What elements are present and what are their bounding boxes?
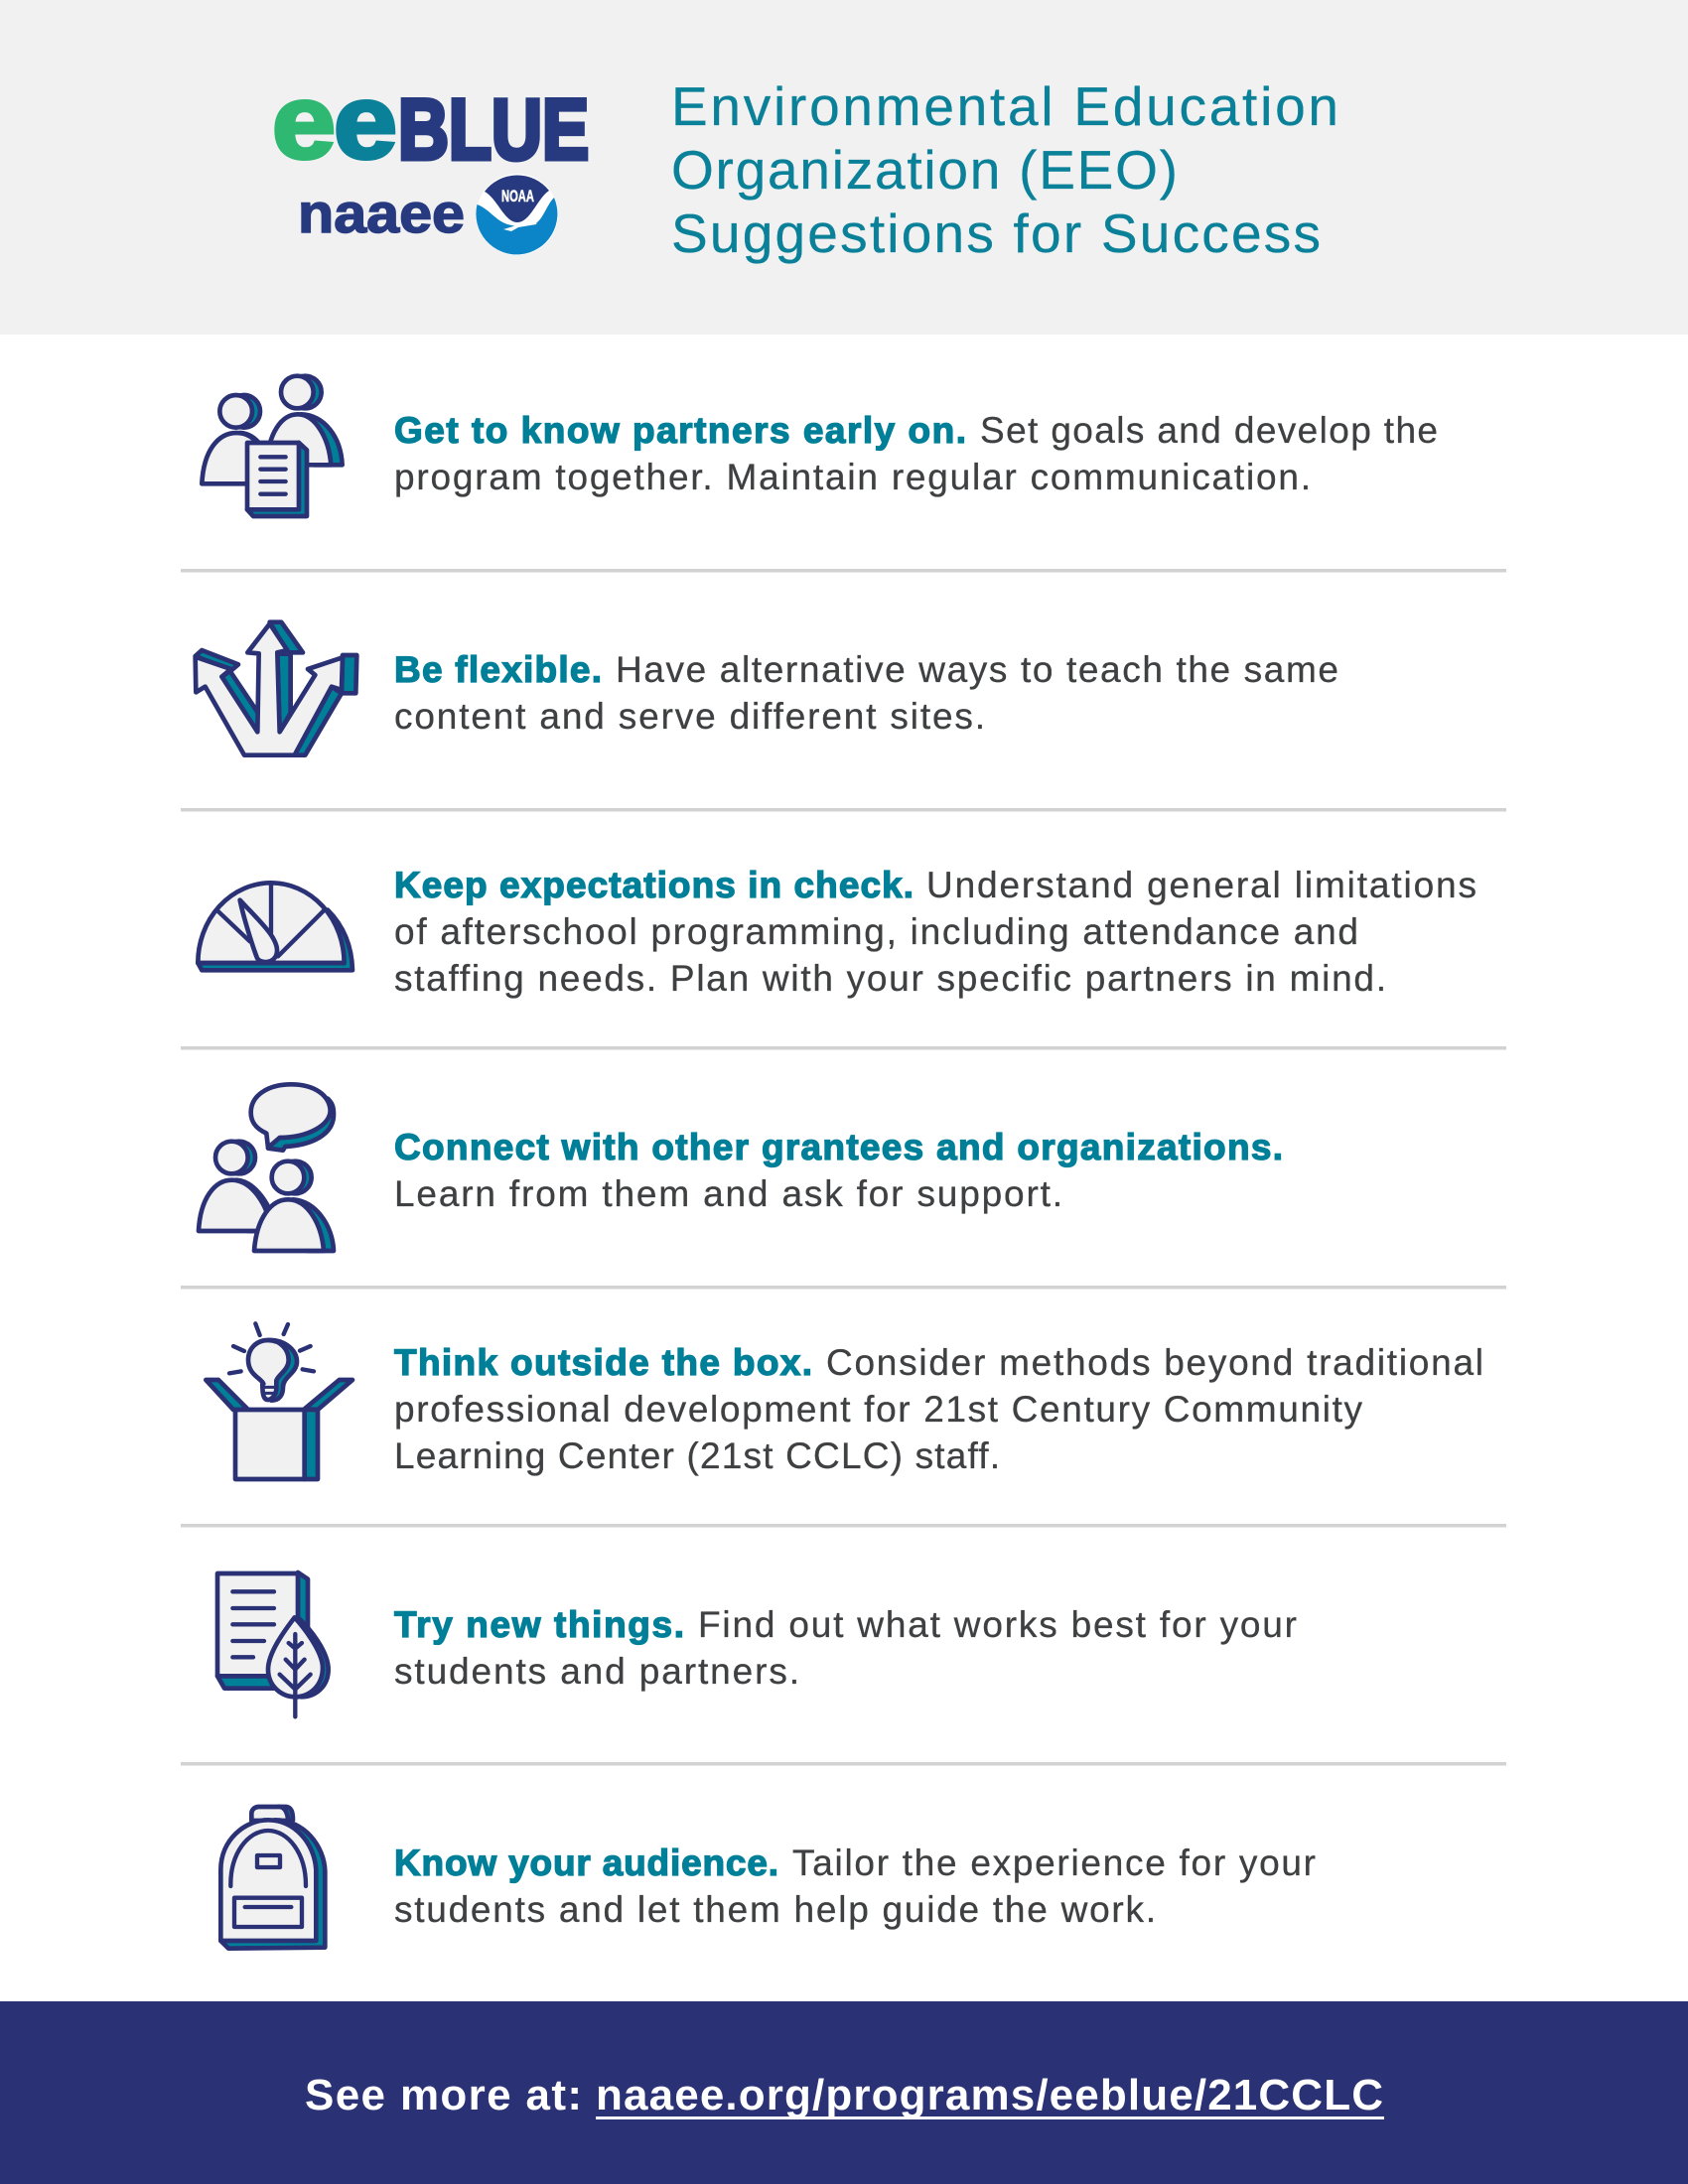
title: Environmental Education [671, 75, 1338, 137]
logo: eeBLUE: e [334, 64, 397, 181]
logo: eeBLUE [272, 64, 589, 181]
text: partners: Get to know partners early on. [394, 410, 966, 451]
text: try new things: Find out what works best for your [698, 1604, 1297, 1645]
text: flexible: content and serve different sites. [394, 696, 985, 737]
text: connect: Connect with other grantees and organizations. [394, 1127, 1283, 1167]
text: partners [394, 410, 1438, 497]
header band [0, 0, 1688, 335]
text: connect: Learn from them and ask for support. [394, 1173, 1062, 1214]
logo: NOAA seal [476, 174, 558, 255]
text: flexible [394, 649, 1338, 737]
row 1: partners [202, 376, 1438, 516]
title: Suggestions for Success [671, 203, 1321, 264]
footer link text: See more at: [305, 2071, 582, 2119]
text: connect [394, 1127, 1283, 1214]
text: partners: program together. Maintain regular communication. [394, 457, 1311, 497]
row 3: expectations [198, 865, 1477, 999]
icon: document with leaf [217, 1572, 329, 1716]
text: audience: students and let them help guide the work. [394, 1889, 1156, 1930]
text: outside the box: Think outside the box. [394, 1342, 812, 1383]
text: expectations: of afterschool programming, including attendance and [394, 911, 1358, 952]
text: audience: Tailor the experience for your [792, 1843, 1316, 1883]
icon: two people with document [202, 376, 343, 516]
title [671, 75, 1338, 264]
row 2: flexible [196, 622, 1338, 755]
logo: eeBLUE: BLUE [398, 82, 589, 178]
icon: branching arrows [196, 622, 356, 755]
icon: two people with speech bubble [199, 1084, 334, 1251]
text: audience: Know your audience. [394, 1843, 778, 1883]
icon: backpack [220, 1807, 325, 1949]
text: outside the box: Consider methods beyond traditional [826, 1342, 1483, 1383]
footer band [0, 2001, 1688, 2184]
logo: NOAA seal: NOAA [501, 187, 534, 205]
text: outside the box: Learning Center (21st CCLC) staff. [394, 1435, 1000, 1476]
text: outside the box: professional development for 21st Century Community [394, 1389, 1362, 1430]
icon: gauge [198, 883, 352, 970]
title: Organization (EEO) [671, 139, 1178, 201]
logo: naaee: naaee [298, 182, 465, 244]
text: partners: Set goals and develop the [980, 410, 1438, 451]
text: flexible: Have alternative ways to teach the same [616, 649, 1338, 690]
text: try new things: students and partners. [394, 1651, 799, 1692]
text: try new things [394, 1604, 1297, 1692]
icon: open box with lightbulb [206, 1323, 352, 1479]
text: audience [394, 1843, 1316, 1930]
text: expectations [394, 865, 1477, 999]
text: expectations: Keep expectations in check. [394, 865, 914, 905]
logo: eeBLUE: e [272, 64, 336, 181]
text: flexible: Be flexible. [394, 649, 602, 690]
row 7: audience [220, 1807, 1316, 1949]
footer link text: naaee.org/programs/eeblue/21CCLC [596, 2071, 1383, 2119]
text: expectations: staffing needs. Plan with your specific partners in mind. [394, 958, 1386, 999]
text: expectations: Understand general limitations [926, 865, 1477, 905]
text: try new things: Try new things. [394, 1604, 684, 1645]
row 6: try new things [217, 1572, 1297, 1716]
text: outside the box [394, 1342, 1483, 1476]
row 5: outside the box [206, 1323, 1483, 1479]
row 4: connect [199, 1084, 1283, 1251]
